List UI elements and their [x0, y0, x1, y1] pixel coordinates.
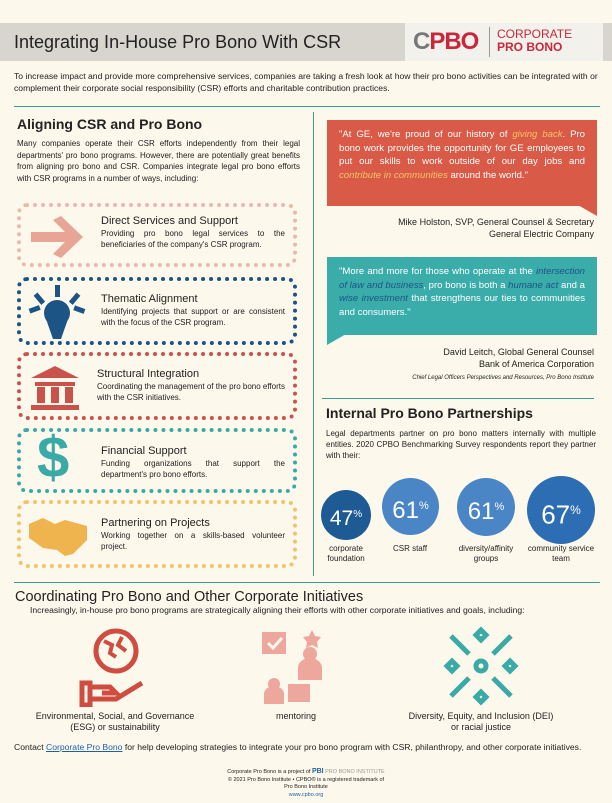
- chart: partnership circles: 61%: [468, 498, 504, 525]
- panel: thematic: [17, 277, 297, 345]
- logo: [405, 23, 603, 61]
- quote: BofA: [327, 257, 597, 335]
- chart: partnership circles: groups: [474, 554, 498, 563]
- label: mentoring: mentoring: [276, 711, 316, 721]
- label: ESG: (ESG) or sustainability: [70, 722, 160, 732]
- chart: partnership circles: team: [552, 554, 570, 563]
- attribution: GE: Mike Holston, SVP, General Counsel & Secretary: [398, 217, 594, 227]
- attribution: BofA: [412, 347, 594, 381]
- attribution: BofA: Bank of America Corporation: [479, 359, 594, 369]
- panel: partnering: [17, 500, 297, 568]
- quote: GE: "At GE, we're proud of our history of giving back. Pro bono work provides the opportunity for GE employees to put our skills to work outside of our day jobs and contribute in communities around the world.": [339, 129, 585, 180]
- chart: partnership circles: 47%: [330, 507, 362, 530]
- panel: structural: Coordinating the management of the pro bono efforts with the CSR initiatives.: [97, 382, 285, 402]
- chart: partnership circles: 67%: [541, 500, 581, 530]
- footer: www.cpbo.org: [289, 792, 323, 798]
- label: DEI: Diversity, Equity, and Inclusion (DEI): [409, 711, 553, 721]
- icon: DEI hands: [444, 626, 518, 706]
- panel: direct services: Direct Services and Support: [101, 215, 238, 227]
- text: coordinating intro: Increasingly, in-house pro bono programs are strategically aligning their efforts with other corporate initiatives and goals, including:: [30, 605, 525, 615]
- panel: partnering: Partnering on Projects: [101, 517, 210, 529]
- paragraph: aligning: Many companies operate their CSR efforts independently from their legal departments' pro bono programs. However, there are potentially great benefits from aligning pro bono and CSR. Companies integrate legal pro bono efforts with CSR programs in a number of ways, including:: [17, 139, 300, 182]
- panel: partnering: Working together on a skills-based volunteer project.: [101, 531, 285, 551]
- icon: mentoring: [262, 630, 322, 704]
- label: ESG: Environmental, Social, and Governance: [36, 711, 194, 721]
- label: DEI: [409, 711, 553, 732]
- icon: bulb: [28, 285, 86, 339]
- panel: financial: [17, 428, 297, 493]
- panel: financial: Funding organizations that support the department's pro bono efforts.: [101, 459, 285, 479]
- attribution: BofA: Chief Legal Officers Perspectives and Resources, Pro Bono Institute: [412, 375, 594, 381]
- heading: partnerships: Internal Pro Bono Partnerships: [326, 405, 533, 421]
- panel: thematic: Thematic Alignment: [101, 293, 198, 305]
- attribution: BofA: David Leitch, Global General Counsel: [443, 347, 594, 357]
- panel: structural: [17, 352, 297, 420]
- chart: partnership circles: corporate: [329, 544, 363, 553]
- footer: Corporate Pro Bono is a project of PBI PRO BONO INSTITUTE: [227, 768, 385, 775]
- logo: PRO BONO: [497, 40, 562, 54]
- logo: CPBO: [413, 28, 478, 55]
- chart: partnership circles: 61%: [392, 497, 429, 524]
- chart: partnership circles: [321, 476, 595, 563]
- panel: thematic: Identifying projects that support or are consistent with the focus of the CSR program.: [101, 307, 285, 327]
- label: ESG: [36, 711, 194, 732]
- icon: building: [31, 366, 79, 410]
- icon: arrow: [31, 216, 83, 258]
- panel: direct services: Providing pro bono legal services to the beneficiaries of the company's CSR program.: [101, 229, 285, 249]
- footer: © 2021 Pro Bono Institute • CPBO® is a registered trademark of: [228, 776, 384, 782]
- quote: BofA: "More and more for those who operate at the intersection of law and business, pro bono is both a humane act and a wise investment that strengthens our ties to communities and consumers.": [339, 266, 585, 318]
- footer: [227, 768, 385, 798]
- chart: partnership circles: CSR staff: [393, 544, 427, 553]
- chart: partnership circles: community service: [528, 544, 594, 553]
- quote: GE: [327, 120, 597, 206]
- label: DEI: or racial justice: [451, 722, 511, 732]
- chart: partnership circles: diversity/affinity: [459, 544, 513, 553]
- intro text: To increase impact and provide more comprehensive services, companies are taking a fresh look at how their pro bono activities can be integrated with or complement their corporate social responsibility (CSR) efforts and charitable contribution practices.: [14, 71, 598, 93]
- attribution: GE: General Electric Company: [489, 229, 594, 239]
- attribution: GE: [398, 217, 594, 239]
- title: Integrating In-House Pro Bono With CSR: [14, 32, 341, 52]
- footer: Pro Bono Institute: [284, 784, 328, 790]
- header band: [0, 23, 612, 61]
- icon: handshake: [29, 518, 87, 556]
- heading: aligning: Aligning CSR and Pro Bono: [17, 116, 202, 132]
- logo: CORPORATE: [497, 27, 572, 41]
- text: contact: Contact Corporate Pro Bono for help developing strategies to integrate your pro bono program with CSR, philanthropy, and other corporate initiatives.: [14, 742, 581, 752]
- heading: coordinating: Coordinating Pro Bono and Other Corporate Initiatives: [15, 589, 363, 605]
- icon: globe hand: [80, 628, 144, 707]
- icon: dollar: $: [37, 425, 69, 490]
- panel: direct services: [17, 203, 297, 267]
- panel: structural: Structural Integration: [97, 368, 199, 380]
- chart: partnership circles: foundation: [327, 554, 365, 563]
- paragraph: partnerships: Legal departments partner on pro bono matters internally with multiple entities. 2020 CPBO Benchmarking Survey respondents report they partner with their:: [326, 429, 596, 460]
- panel: financial: Financial Support: [101, 445, 187, 457]
